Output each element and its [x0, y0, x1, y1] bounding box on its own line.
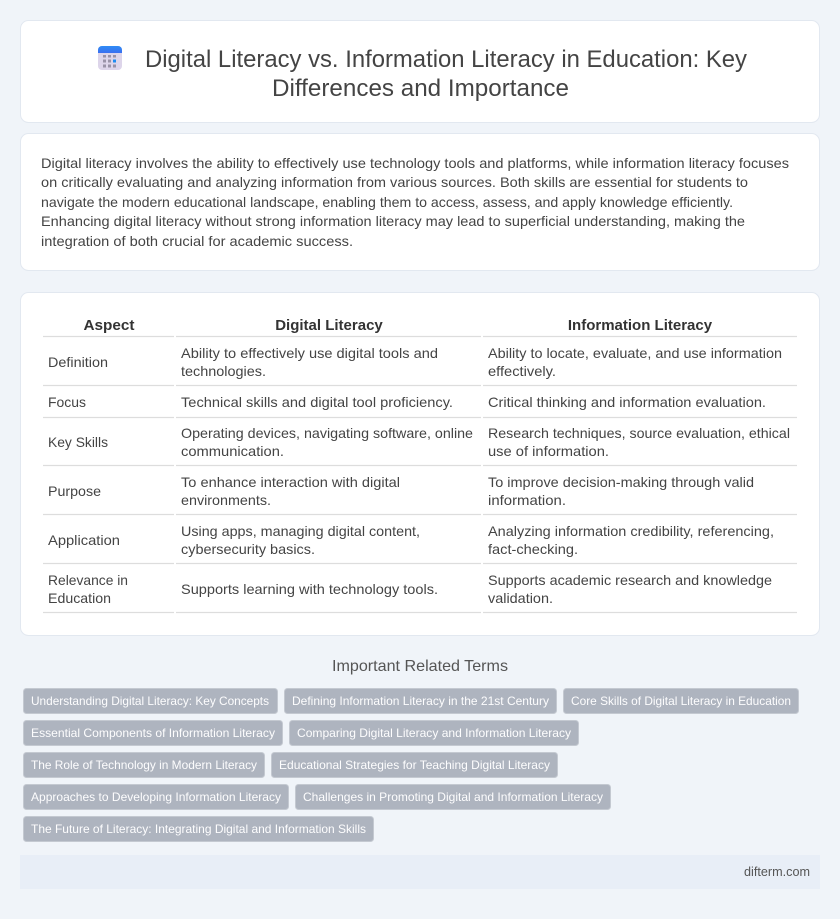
row: definition: Ability to locate, evaluate, and use information: [488, 345, 782, 361]
row: focus: [48, 394, 766, 410]
text block: introduction paragraph: Enhancing digital literacy without strong information literacy may lead to superficial understanding, making the: [41, 213, 745, 229]
tag: [296, 784, 610, 810]
tag: The Role of Technology in Modern Literacy: [31, 758, 257, 772]
text block: introduction paragraph: on critically evaluating and analyzing information from various sources. Both skills are essential for students to: [41, 174, 748, 190]
title: Digital Literacy vs. Information Literacy in Education: Key: [145, 46, 747, 73]
row: application: Analyzing information credibility, referencing,: [488, 523, 774, 539]
tag: [284, 688, 556, 714]
row: relevance in education: validation.: [488, 590, 553, 606]
row: definition: [48, 345, 782, 379]
row: key skills: communication.: [181, 443, 284, 459]
text block: introduction paragraph: Digital literacy involves the ability to effectively use technology tools and platforms, while information literacy focuses: [41, 155, 789, 171]
heading: related terms: Important Related Terms: [332, 658, 508, 675]
row: definition: technologies.: [181, 363, 266, 379]
row: application: [48, 523, 774, 557]
row: purpose: To enhance interaction with digital: [181, 474, 400, 490]
tag: Comparing Digital Literacy and Information Literacy: [297, 726, 571, 740]
tag: [290, 720, 578, 746]
tag: Educational Strategies for Teaching Digital Literacy: [279, 758, 550, 772]
row: key skills: [48, 425, 790, 459]
table header: Aspect: [84, 317, 134, 334]
tag: [564, 688, 798, 714]
row: relevance in education: Relevance in: [48, 572, 128, 588]
text block: introduction paragraph: [41, 155, 789, 249]
row: key skills: Research techniques, source evaluation, ethical: [488, 425, 790, 441]
tag list: related terms: [24, 688, 798, 842]
tag: The Future of Literacy: Integrating Digital and Information Skills: [31, 822, 366, 836]
panel: introduction: [20, 134, 820, 270]
row: purpose: To improve decision-making through valid: [488, 474, 754, 490]
text block: introduction paragraph: navigate the modern educational landscape, enabling them to access, assess, and apply knowledge efficiently.: [41, 194, 733, 210]
tag: Understanding Digital Literacy: Key Concepts: [31, 694, 269, 708]
tag: Core Skills of Digital Literacy in Education: [571, 694, 791, 708]
text block: introduction paragraph: integration of both crucial for academic success.: [41, 233, 353, 249]
row: key skills: Operating devices, navigating software, online: [181, 425, 473, 441]
table header: Digital Literacy: [275, 317, 383, 334]
row: focus: Focus: [48, 394, 86, 410]
row: purpose: Purpose: [48, 483, 101, 499]
tag: Challenges in Promoting Digital and Information Literacy: [303, 790, 603, 804]
tag: Approaches to Developing Information Literacy: [31, 790, 281, 804]
table header: [84, 317, 713, 334]
table grid lines: [43, 336, 797, 612]
row: key skills: Key Skills: [48, 434, 108, 450]
tag: [24, 816, 374, 842]
tag: [272, 752, 558, 778]
row: purpose: information.: [488, 492, 566, 508]
row: purpose: [48, 474, 754, 508]
row: relevance in education: Supports academic research and knowledge: [488, 572, 772, 588]
row: definition: effectively.: [488, 363, 556, 379]
row: focus: Technical skills and digital tool proficiency.: [181, 394, 453, 410]
title: Differences and Importance: [272, 75, 569, 102]
row: application: cybersecurity basics.: [181, 541, 315, 557]
tag: Essential Components of Information Literacy: [31, 726, 275, 740]
row: relevance in education: [48, 572, 772, 606]
tag: [24, 784, 288, 810]
row: relevance in education: Education: [48, 590, 111, 606]
row: application: Application: [48, 532, 120, 548]
tag: [24, 752, 264, 778]
row: application: Using apps, managing digital content,: [181, 523, 420, 539]
row: purpose: environments.: [181, 492, 271, 508]
row: definition: Ability to effectively use digital tools and: [181, 345, 438, 361]
panel: title card: [20, 20, 820, 122]
title: [145, 46, 747, 102]
row: application: fact-checking.: [488, 541, 578, 557]
row: key skills: use of information.: [488, 443, 609, 459]
tag: [24, 720, 282, 746]
table header: Information Literacy: [568, 317, 713, 334]
footer: difterm.com: [744, 864, 810, 879]
tag: Defining Information Literacy in the 21st Century: [292, 694, 549, 708]
row: definition: Definition: [48, 354, 108, 370]
tag: [24, 688, 278, 714]
row: focus: Critical thinking and information evaluation.: [488, 394, 766, 410]
row: relevance in education: Supports learning with technology tools.: [181, 581, 438, 597]
panel: comparison table: [20, 292, 820, 636]
footer: [20, 855, 820, 889]
icon: calendar: [98, 46, 122, 70]
